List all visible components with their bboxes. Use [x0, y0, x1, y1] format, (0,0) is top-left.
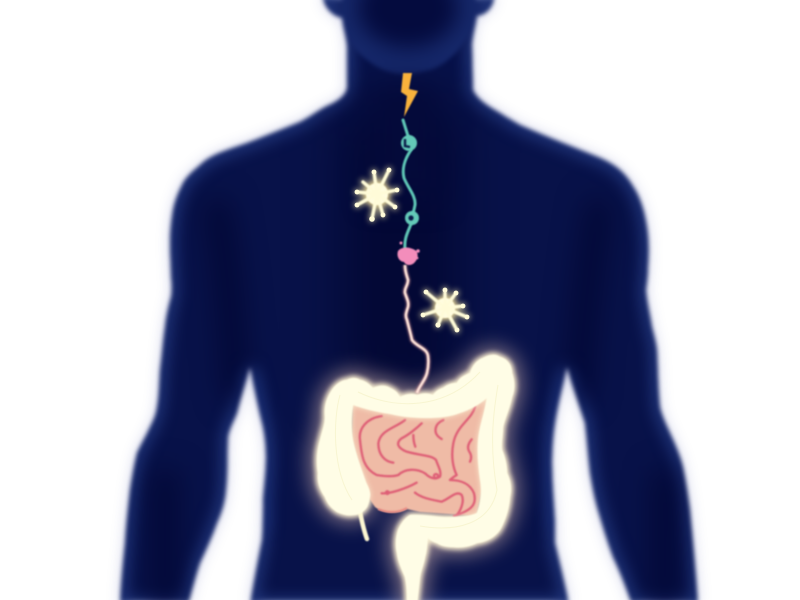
chest and arm dark shading: [165, 200, 665, 600]
head with jaw rim: [342, 0, 476, 74]
gut glow halo: [317, 355, 514, 600]
nerve: lower pink segment: [405, 265, 428, 393]
small intestine folds: [360, 407, 475, 516]
nerve: upper teal segment: [401, 120, 419, 249]
nerve cell body upper: [401, 135, 417, 151]
immune cell: lower star: [421, 288, 469, 332]
small intestine: [352, 396, 487, 516]
synapse: pink blob: [397, 242, 420, 265]
large intestine: [317, 355, 514, 600]
immune cell: upper star: [355, 168, 399, 222]
lightning bolt: [401, 73, 418, 117]
appendix: [360, 512, 367, 539]
body silhouette: [114, 0, 704, 600]
illustration: vagus nerve and gut in human torso: [114, 0, 704, 600]
nerve cell body lower: [405, 211, 419, 225]
